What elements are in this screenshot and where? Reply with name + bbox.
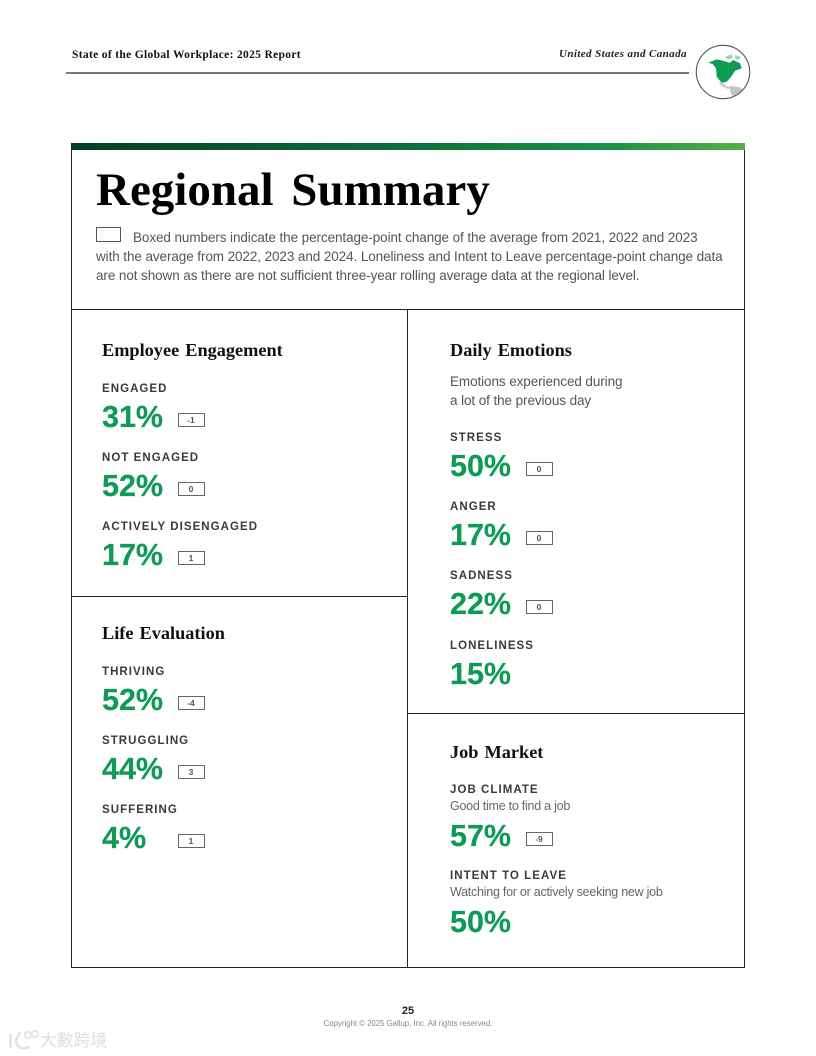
- metric: engaged: 31%: [102, 400, 163, 434]
- main frame: [71, 143, 745, 968]
- metric: anger: 17%: [450, 518, 511, 552]
- metric: sadness: 0: [537, 602, 541, 612]
- watermark logo: [9, 1030, 39, 1050]
- metric: sadness: SADNESS: [450, 570, 513, 582]
- divider: right panels: [408, 713, 744, 714]
- icon: globe with North America highlighted: [696, 44, 750, 100]
- metric: stress: 50%: [450, 449, 511, 483]
- metric: thriving: [102, 666, 205, 717]
- watermark: [9, 1030, 107, 1050]
- metric: suffering: 1: [189, 836, 193, 846]
- divider: left panels: [72, 596, 407, 597]
- metric: intent to leave: INTENT TO LEAVE: [450, 870, 567, 882]
- metric: struggling: 44%: [102, 752, 163, 786]
- metric: thriving: THRIVING: [102, 666, 165, 678]
- metric: sadness: 22%: [450, 587, 511, 621]
- gradient top bar: [72, 143, 745, 150]
- header: rule: [66, 72, 689, 74]
- intro text: Boxed numbers indicate the percentage-point change of the average from 2021, 2022 and 2023: [133, 230, 698, 245]
- metric: suffering: SUFFERING: [102, 804, 178, 816]
- divider: below intro: [72, 309, 744, 310]
- metric: actively disengaged: [102, 521, 258, 572]
- metric: anger: 0: [537, 532, 541, 542]
- divider: vertical center: [407, 310, 408, 967]
- metric: struggling: STRUGGLING: [102, 735, 189, 747]
- metric: engaged: [102, 383, 205, 434]
- metric: loneliness: 15%: [450, 657, 511, 691]
- metric: engaged: -1: [187, 414, 195, 424]
- metric: stress: [450, 432, 553, 483]
- panel: job market: [450, 742, 663, 939]
- metric: actively disengaged: ACTIVELY DISENGAGED: [102, 521, 258, 533]
- metric: not engaged: 52%: [102, 469, 163, 503]
- metric: intent to leave: [450, 870, 663, 939]
- metric: intent to leave: 50%: [450, 905, 511, 939]
- metric: suffering: 4%: [102, 821, 146, 855]
- heading: employee engagement: Employee Engagement: [102, 340, 283, 360]
- description: daily emotions: a lot of the previous day: [450, 393, 591, 408]
- metric: struggling: 3: [189, 766, 193, 776]
- page number: 25: [402, 1005, 414, 1017]
- heading: daily emotions: Daily Emotions: [450, 340, 572, 360]
- metric: not engaged: 0: [189, 484, 193, 494]
- metric: intent to leave: Watching for or actively seeking new job: [450, 885, 663, 899]
- metric: anger: [450, 501, 553, 552]
- metric: actively disengaged: 1: [189, 552, 193, 562]
- metric: job climate: [450, 784, 570, 853]
- metric: loneliness: LONELINESS: [450, 640, 534, 652]
- metric: job climate: 57%: [450, 819, 511, 853]
- intro text: [96, 230, 723, 283]
- metric: engaged: ENGAGED: [102, 383, 168, 395]
- metric: sadness: [450, 570, 553, 621]
- metric: anger: ANGER: [450, 501, 497, 513]
- intro text: with the average from 2022, 2023 and 2024. Loneliness and Intent to Leave percentage-point change data: [96, 249, 723, 264]
- intro text: are not shown as there are not sufficient three-year rolling average data at the regional level.: [96, 268, 639, 283]
- metric: not engaged: NOT ENGAGED: [102, 452, 199, 464]
- metric: thriving: 52%: [102, 683, 163, 717]
- watermark text: 大數跨境: [40, 1031, 107, 1050]
- metric: struggling: [102, 735, 205, 786]
- panel: employee engagement: [102, 340, 283, 572]
- title: Regional Summary: [96, 164, 490, 216]
- legend box sample: [96, 227, 121, 242]
- metric: suffering: [102, 804, 205, 855]
- metric: job climate: JOB CLIMATE: [450, 784, 539, 796]
- metric: thriving: -4: [187, 698, 195, 708]
- panel: life evaluation: [102, 623, 225, 855]
- copyright: Copyright © 2025 Gallup, Inc. All rights reserved.: [324, 1019, 492, 1028]
- metric: stress: 0: [537, 464, 541, 474]
- metric: actively disengaged: 17%: [102, 538, 163, 572]
- description: daily emotions: [450, 374, 622, 408]
- metric: job climate: Good time to find a job: [450, 799, 570, 813]
- header: region name: United States and Canada: [559, 48, 687, 60]
- panel: daily emotions: [450, 340, 622, 691]
- metric: not engaged: [102, 452, 205, 503]
- heading: life evaluation: Life Evaluation: [102, 623, 225, 643]
- heading: job market: Job Market: [450, 742, 543, 762]
- description: daily emotions: Emotions experienced during: [450, 374, 622, 389]
- metric: loneliness: [450, 640, 534, 691]
- metric: stress: STRESS: [450, 432, 502, 444]
- metric: job climate: -9: [535, 834, 543, 844]
- header: report title: State of the Global Workplace: 2025 Report: [72, 49, 301, 61]
